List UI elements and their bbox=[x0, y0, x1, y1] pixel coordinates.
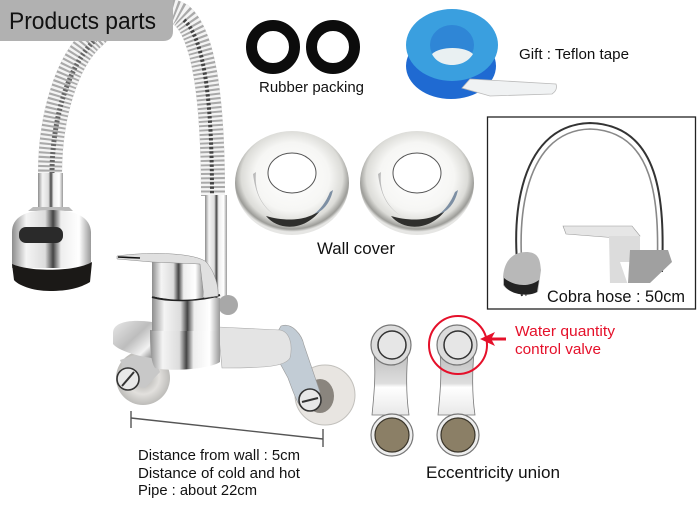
eccentric union left bbox=[371, 325, 413, 456]
title tag bbox=[0, 0, 173, 41]
label: distance text: Pipe : about 22cm bbox=[138, 482, 257, 499]
label: rubber packing: Rubber packing bbox=[259, 79, 364, 96]
eccentric union right bbox=[437, 325, 479, 456]
label: distance text: Distance of cold and hot bbox=[138, 465, 301, 482]
rubber packing rings bbox=[252, 26, 354, 68]
main faucet bbox=[12, 9, 355, 425]
wall cover right bbox=[360, 131, 474, 235]
wall cover left bbox=[235, 131, 349, 235]
label: water quantity control valve: control valve bbox=[515, 341, 601, 358]
spray head bbox=[12, 173, 92, 291]
flexible hose bbox=[50, 9, 213, 196]
label: teflon tape: Gift : Teflon tape bbox=[519, 46, 629, 63]
label: eccentricity union: Eccentricity union bbox=[426, 463, 560, 482]
red highlight circle bbox=[429, 316, 487, 374]
title tag: Products parts bbox=[9, 8, 156, 35]
panel: cobra hose bbox=[488, 117, 696, 309]
label: water quantity control valve: Water quantity bbox=[515, 323, 616, 340]
red arrow bbox=[480, 332, 506, 346]
cobra faucet photo bbox=[503, 123, 672, 296]
label: cobra hose bbox=[545, 283, 689, 308]
label: wall cover: Wall cover bbox=[317, 240, 396, 258]
teflon tape spool bbox=[406, 9, 556, 99]
measure line bbox=[131, 411, 323, 447]
label: distance text: Distance from wall : 5cm bbox=[138, 447, 300, 464]
rigid pipe bbox=[205, 195, 227, 300]
label: cobra hose: Cobra hose : 50cm bbox=[547, 288, 685, 306]
mixer body bbox=[113, 253, 355, 425]
